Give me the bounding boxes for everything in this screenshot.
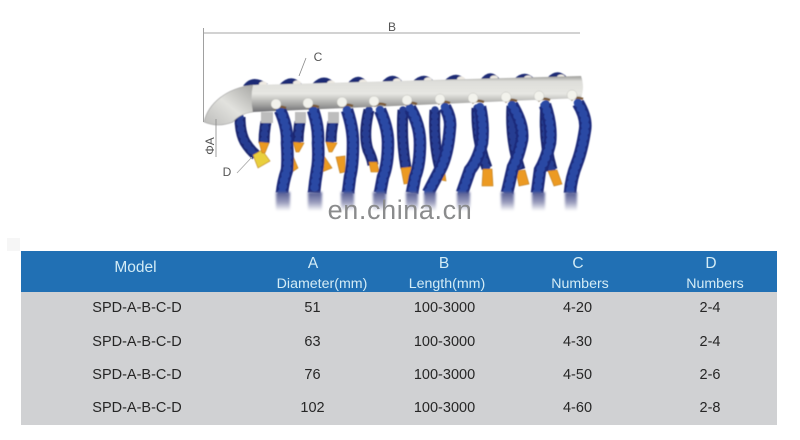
header: B Length xyxy=(409,255,485,292)
row 4 xyxy=(92,400,720,416)
header: A Diameter xyxy=(277,255,367,292)
extension line at the left of dimension B xyxy=(202,28,204,122)
row 2: 4-30 xyxy=(563,334,592,350)
pipe body with elbow xyxy=(204,76,583,125)
row 3 xyxy=(92,367,720,383)
row 1 xyxy=(92,300,720,316)
row 4: 4-60 xyxy=(563,400,592,416)
row 4: 100-3000 xyxy=(414,400,475,416)
dimension phi A: ΦA xyxy=(203,137,217,155)
row 1: 2-4 xyxy=(700,300,720,316)
header: Model: Model xyxy=(114,259,157,276)
row 2: 2-4 xyxy=(700,334,720,350)
row 1: 4-20 xyxy=(563,300,592,316)
table xyxy=(21,251,777,425)
header: D Numbers: Numbers xyxy=(686,276,744,292)
header: C Numbers xyxy=(551,255,609,292)
header: A Diameter: A xyxy=(308,255,319,272)
nozzle collars and white balls xyxy=(271,90,583,109)
table body background xyxy=(21,292,777,425)
rear hoses xyxy=(240,104,552,172)
white fittings at the top of the pipe xyxy=(259,74,565,86)
dimension B: B xyxy=(388,20,396,34)
watermark: en.china.cn xyxy=(328,195,472,225)
rear hose humps xyxy=(243,72,567,86)
row 3: 2-6 xyxy=(700,367,720,383)
orange nozzles xyxy=(253,142,562,186)
callout D xyxy=(223,157,252,179)
row 3: SPD-A-B-C-D xyxy=(92,367,182,383)
faded hose reflections xyxy=(276,192,577,211)
table header band xyxy=(21,251,777,292)
row 4: 2-8 xyxy=(700,400,720,416)
row 1: 51 xyxy=(304,300,321,316)
row 3: 76 xyxy=(304,367,321,383)
header: C Numbers: Numbers xyxy=(551,276,609,292)
row 3: 100-3000 xyxy=(414,367,475,383)
dimension phi A xyxy=(203,119,217,157)
header: D Numbers: D xyxy=(705,255,717,272)
row 2 xyxy=(92,334,720,350)
callout C: C xyxy=(314,50,323,64)
header: B Length: Length(mm) xyxy=(409,276,485,292)
header: C Numbers: C xyxy=(572,255,584,272)
header: B Length: B xyxy=(439,255,449,272)
row 1: SPD-A-B-C-D xyxy=(92,300,182,316)
row 4: 102 xyxy=(300,400,325,416)
grey couplings xyxy=(261,112,339,123)
row 2: SPD-A-B-C-D xyxy=(92,334,182,350)
row 1: 100-3000 xyxy=(414,300,475,316)
row 4: SPD-A-B-C-D xyxy=(92,400,182,416)
header: A Diameter: Diameter(mm) xyxy=(277,276,367,292)
header: D Numbers xyxy=(686,255,744,292)
callout D: D xyxy=(223,165,232,179)
pipe assembly xyxy=(204,72,585,193)
callout C xyxy=(299,50,323,76)
row 3: 4-50 xyxy=(563,367,592,383)
front hoses xyxy=(280,103,585,193)
row 2: 100-3000 xyxy=(414,334,475,350)
faint corner square xyxy=(7,238,20,251)
row 2: 63 xyxy=(304,334,321,350)
